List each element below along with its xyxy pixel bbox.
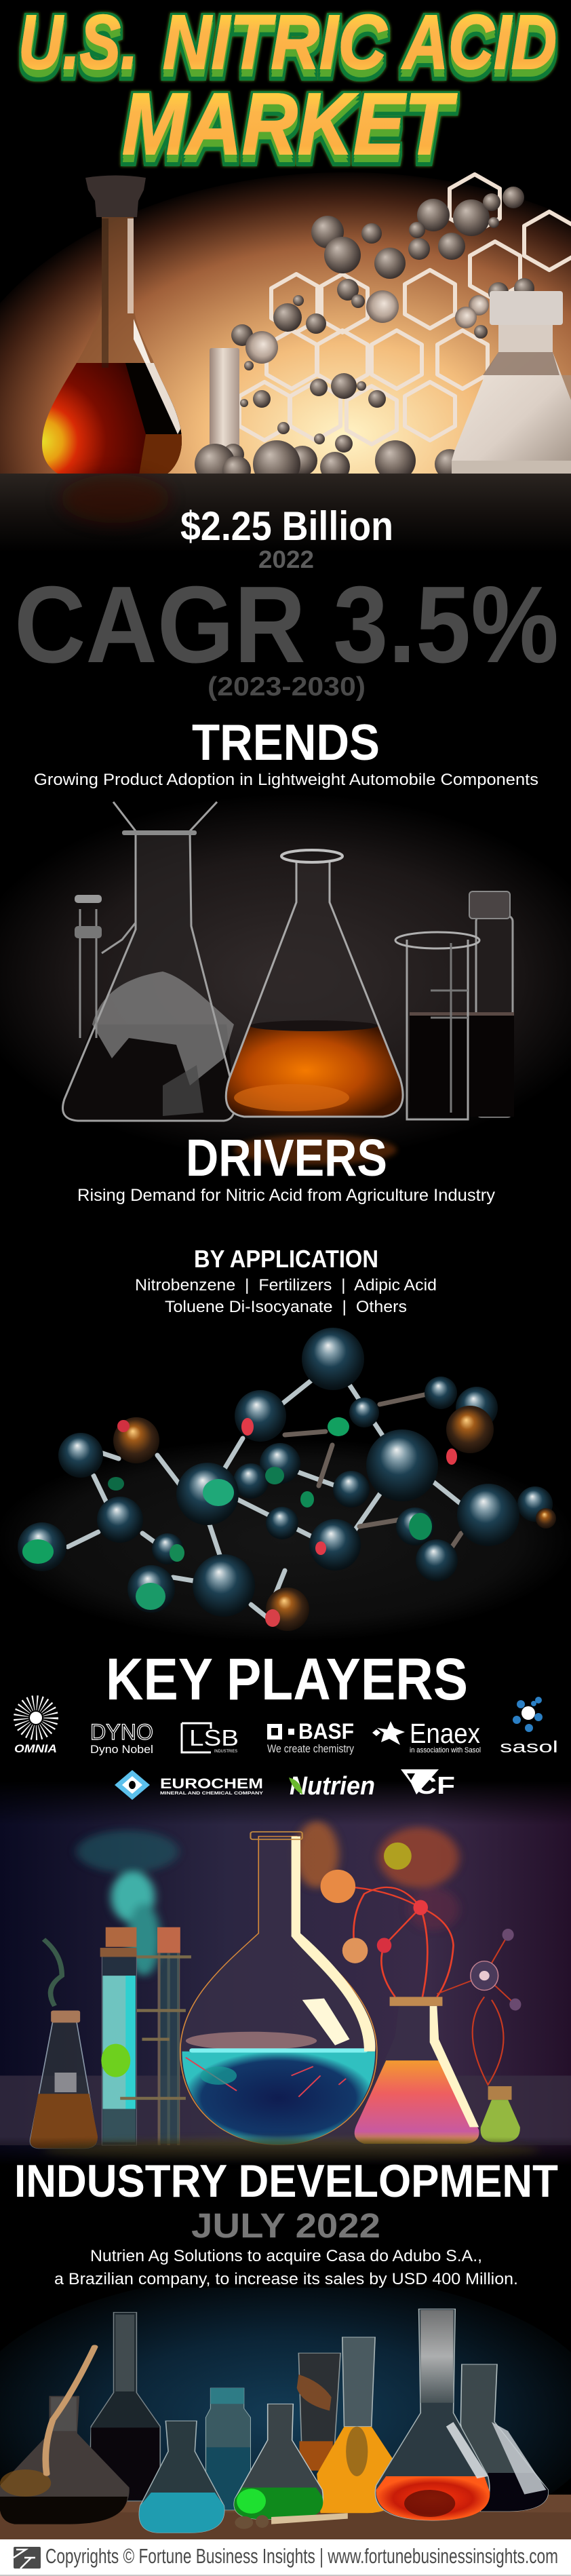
- development text: Nutrien Ag Solutions to acquire Casa do Adubo S.A.,: [90, 2247, 482, 2265]
- logo: LSB Industries: LSB: [189, 1725, 239, 1750]
- molecule hexagon lattice: [239, 174, 571, 444]
- logos: key players: [14, 1697, 558, 1801]
- drivers text: Rising Demand for Nitric Acid from Agriculture Industry: [77, 1186, 496, 1205]
- logo: CF: CF: [415, 1771, 455, 1799]
- logo: Dyno Nobel: DYNO: [90, 1720, 153, 1744]
- spheres on table: [195, 440, 465, 488]
- logo: Sasol: sasol: [500, 1738, 558, 1756]
- left small flask: [30, 1940, 98, 2149]
- footer logo: [14, 2547, 41, 2569]
- CAGR period: (2023-2030): [208, 672, 366, 701]
- market size: $2.25 Billion: [180, 503, 393, 549]
- teal bottle: [205, 2388, 250, 2510]
- logo: BASF: [267, 1719, 354, 1755]
- red flask with frosted neck: [375, 2309, 490, 2520]
- logo: Dyno Nobel: [90, 1720, 153, 1756]
- logo: Omnia: [14, 1703, 57, 1755]
- title: NITRIC: [163, 0, 387, 85]
- metal spheres: [18, 1328, 553, 1617]
- development date: JULY 2022: [191, 2206, 380, 2245]
- teal test tube: [100, 1927, 136, 2145]
- teal flask: [139, 2421, 224, 2533]
- illustration: laboratory flasks and molecule lattice: [0, 172, 571, 536]
- logo: Enaex: [372, 1718, 481, 1754]
- test tube: [210, 348, 239, 455]
- title: [18, 0, 557, 173]
- tall dark flask: [90, 2312, 160, 2501]
- yellow flask: [317, 2337, 404, 2513]
- center flask with orange liquid: [226, 850, 403, 1165]
- drivers heading: DRIVERS: [186, 1129, 387, 1187]
- logo: BASF: BASF: [298, 1719, 354, 1744]
- application list: Toluene Di-Isocyanate | Others: [165, 1298, 407, 1316]
- orange dust: [295, 1821, 459, 1930]
- ground dust: [43, 2139, 539, 2164]
- logo: CF: [401, 1769, 455, 1799]
- right dark flask: [460, 2364, 548, 2512]
- green flask: [234, 2404, 323, 2519]
- title: MARKET: [122, 75, 457, 173]
- logo: Nutrien: Nutrien: [290, 1772, 375, 1801]
- market size year: 2022: [258, 545, 314, 573]
- table floor fade: [0, 474, 571, 552]
- green and red patches: [22, 1417, 457, 1627]
- development text: [54, 2247, 518, 2288]
- illustration: row of coloured flasks on table: [0, 2288, 571, 2539]
- application heading: BY APPLICATION: [194, 1245, 378, 1273]
- trends text: Growing Product Adoption in Lightweight Automobile Components: [34, 771, 538, 789]
- brown flask with rod: [0, 2347, 130, 2524]
- trends heading: TRENDS: [192, 714, 380, 771]
- footer bar: [0, 2539, 571, 2576]
- title: U.S.: [18, 0, 138, 85]
- beaker and bottle: [395, 891, 514, 1119]
- teal smoke: [77, 1830, 178, 1976]
- illustration: colourful chemistry flasks: [0, 1781, 571, 2169]
- logo: Enaex: in association with Sasol: [410, 1746, 481, 1754]
- logo: Enaex: Enaex: [410, 1718, 480, 1749]
- illustration: glass flasks: [0, 794, 571, 1165]
- big round flask: [180, 1832, 377, 2145]
- logo: EuroChem: EUROCHEM: [160, 1776, 263, 1792]
- back amber flask: [297, 2353, 340, 2471]
- bronze spheres: [113, 1406, 556, 1631]
- logo: LSB Industries: INDUSTRIES: [214, 1750, 237, 1754]
- round bottom flask: [42, 175, 182, 474]
- application list: [135, 1276, 437, 1316]
- logo: Sasol: [500, 1697, 558, 1756]
- right conical flask: [355, 1997, 479, 2144]
- molecule bonds: [68, 1377, 468, 1618]
- development text: a Brazilian company, to increase its sales by USD 400 Million.: [54, 2270, 518, 2288]
- logo: Dyno Nobel: Dyno Nobel: [90, 1743, 153, 1756]
- atoms network: [321, 1843, 521, 2085]
- logo: EuroChem: [115, 1770, 263, 1800]
- logo: Omnia: OMNIA: [14, 1742, 57, 1755]
- left flask with dark liquid: [62, 802, 235, 1121]
- illustration: metallic molecule: [0, 1328, 571, 1642]
- key players heading: KEY PLAYERS: [106, 1647, 468, 1712]
- cork tube: [235, 2513, 348, 2529]
- logo: EuroChem: MINERAL AND CHEMICAL COMPANY: [160, 1792, 263, 1796]
- retort stand: [120, 1927, 191, 2145]
- molecule balls: [231, 187, 534, 453]
- small green flask: [481, 2086, 520, 2142]
- conical flask with white cap: [452, 291, 571, 474]
- logo: LSB Industries: [182, 1723, 239, 1754]
- logo: BASF: We create chemistry: [267, 1742, 354, 1755]
- application list: Nitrobenzene | Fertilizers | Adipic Acid: [135, 1276, 437, 1294]
